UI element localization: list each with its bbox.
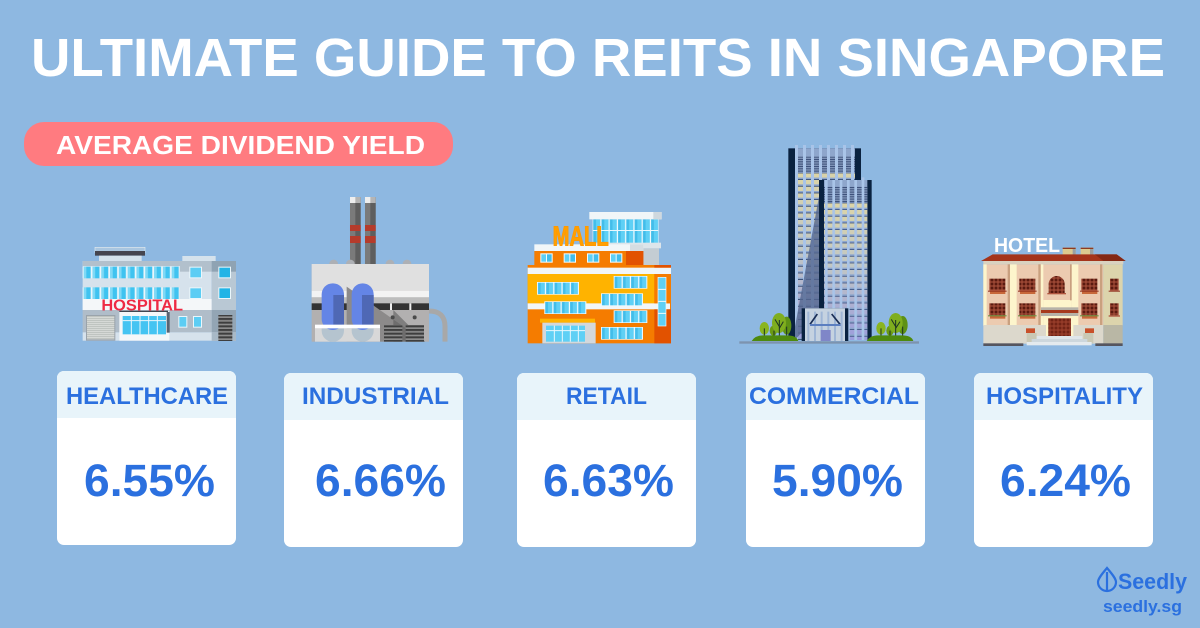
card: industrial: INDUSTRIAL: [302, 383, 449, 410]
card: retail: [517, 373, 696, 547]
icon: industrial factory: [312, 197, 445, 342]
icon: retail mall: MALL: [553, 220, 609, 251]
card: healthcare: HEALTHCARE: [66, 383, 228, 410]
card: commercial: 5.90%: [772, 455, 903, 506]
logo: Seedly: [1098, 568, 1188, 616]
icon: hospital building: [83, 247, 236, 341]
card: retail: RETAIL: [566, 383, 647, 410]
card: healthcare: 6.55%: [84, 455, 215, 506]
card: hospitality: HOSPITALITY: [986, 383, 1143, 410]
card: retail: 6.63%: [543, 455, 674, 506]
card: commercial: COMMERCIAL: [749, 383, 919, 410]
icon: retail mall: [528, 212, 671, 343]
card: industrial: [284, 373, 463, 547]
icon: hotel: HOTEL: [994, 235, 1060, 257]
card: industrial: 6.66%: [315, 455, 446, 506]
card: hospitality: 6.24%: [1000, 455, 1131, 506]
logo: Seedly: seedly.sg: [1103, 597, 1182, 616]
icon: hotel: [981, 235, 1126, 346]
card: hospitality: [974, 373, 1153, 547]
title: ULTIMATE GUIDE TO REITS IN SINGAPORE: [31, 28, 1165, 88]
subtitle pill: average dividend yield: AVERAGE DIVIDEND YIELD: [56, 130, 425, 160]
icon: hospital building: HOSPITAL: [101, 297, 183, 314]
card: commercial: [746, 373, 925, 547]
subtitle pill: average dividend yield: [24, 122, 453, 166]
logo: Seedly: Seedly: [1118, 569, 1188, 594]
card: healthcare: [57, 371, 236, 545]
icon: commercial tower: [739, 145, 919, 344]
